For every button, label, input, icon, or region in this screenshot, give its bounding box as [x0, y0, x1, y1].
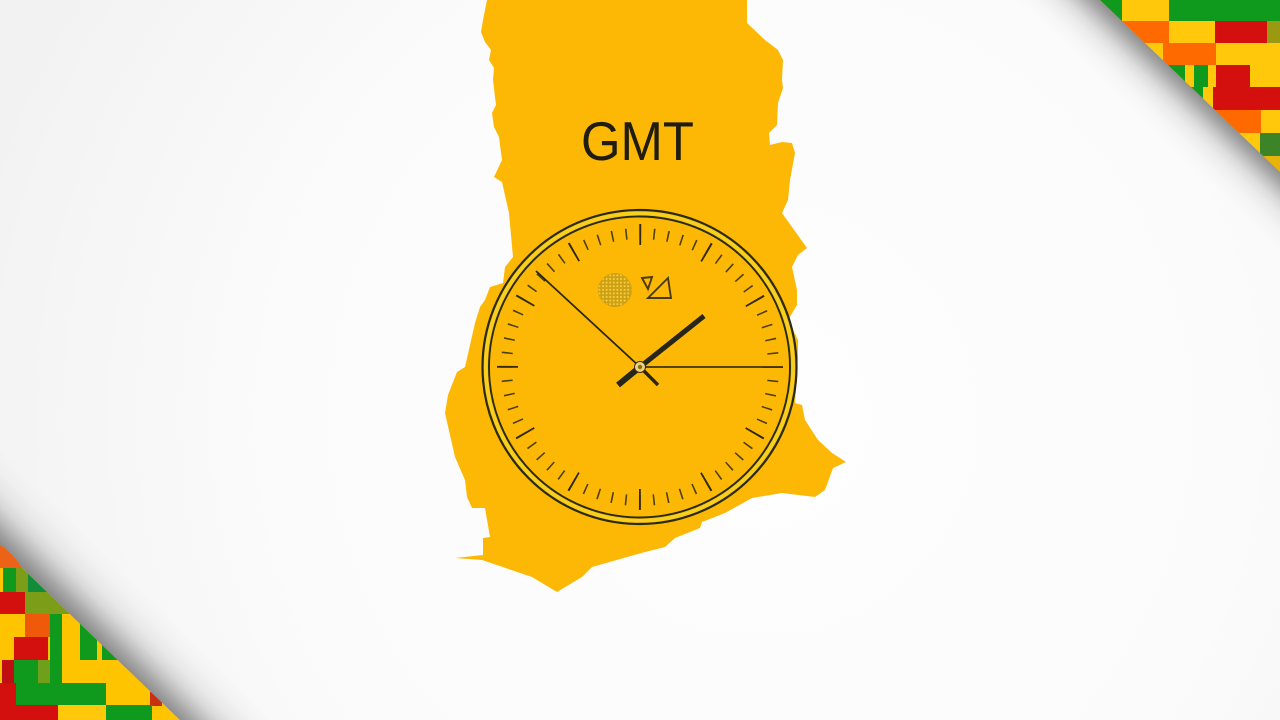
major hour ticks	[508, 234, 772, 500]
hand: thin upper left	[536, 271, 640, 367]
hour hand tail	[618, 367, 640, 385]
icon: dotted sphere logo	[598, 273, 632, 307]
minor minute ticks	[506, 234, 774, 500]
corner shadow: bottom left	[0, 450, 270, 720]
clock	[482, 210, 796, 524]
kente pattern: bottom left corner	[0, 540, 190, 720]
title: GMT: GMT	[581, 110, 694, 172]
icon: triangle logo mark	[642, 277, 671, 298]
map of Ghana	[445, 0, 846, 592]
corner shadow: top right	[1000, 0, 1280, 270]
hour hand	[640, 316, 704, 367]
centre pin	[634, 362, 646, 372]
kente pattern: top right corner	[1090, 0, 1280, 180]
clock rings	[482, 210, 796, 524]
hand: pointing right	[640, 366, 783, 368]
hand tail: lower right	[640, 367, 658, 385]
